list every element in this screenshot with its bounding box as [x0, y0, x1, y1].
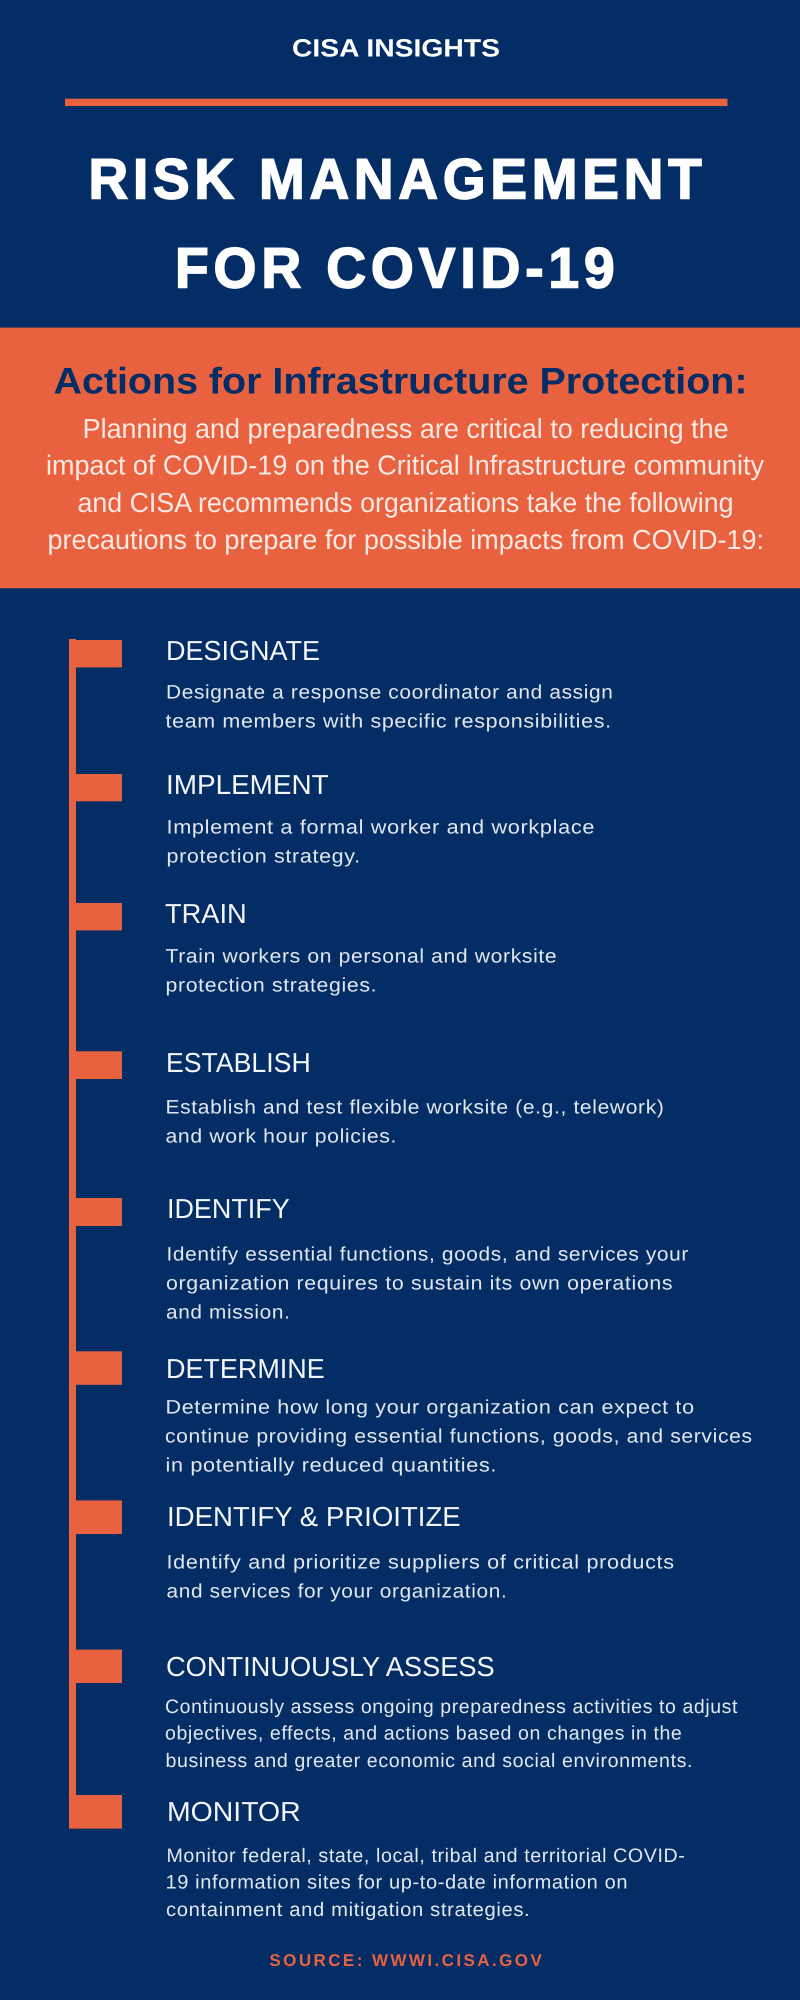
- step: monitor: 19 information sites for up-to-date information on: [166, 1872, 628, 1894]
- header: eyebrow, rule and title: [65, 35, 728, 300]
- step: identify and prioritize: and services for your organization.: [167, 1581, 507, 1603]
- panel: actions for infrastructure protection: [0, 328, 800, 588]
- step: train: TRAIN: [165, 898, 247, 929]
- panel intro text: [46, 413, 764, 555]
- step: continuously assess: Continuously assess ongoing preparedness activities to adjust: [165, 1696, 738, 1718]
- step: implement: IMPLEMENT: [166, 769, 329, 800]
- step: identify: IDENTIFY: [167, 1193, 290, 1224]
- step: establish: Establish and test flexible worksite (e.g., telework): [166, 1096, 665, 1118]
- step: determine: in potentially reduced quantities.: [166, 1454, 497, 1476]
- step: identify: [166, 1193, 689, 1324]
- panel intro text: and CISA recommends organizations take the following: [78, 487, 734, 518]
- timeline spine with markers: [69, 639, 122, 1829]
- step: continuously assess: business and greater economic and social environments.: [166, 1750, 693, 1772]
- step: implement: Implement a formal worker and workplace: [167, 816, 595, 838]
- step: designate: team members with specific responsibilities.: [166, 711, 612, 733]
- step: identify and prioritize: [166, 1501, 675, 1603]
- step: continuously assess: objectives, effects, and actions based on changes in the: [165, 1723, 682, 1745]
- step: identify: organization requires to sustain its own operations: [166, 1273, 673, 1295]
- step: determine: DETERMINE: [166, 1353, 325, 1384]
- step: designate: DESIGNATE: [166, 635, 320, 666]
- step: monitor: [166, 1796, 685, 1921]
- panel intro text: impact of COVID-19 on the Critical Infrastructure community: [46, 450, 764, 481]
- eyebrow: CISA Insights: CISA INSIGHTS: [292, 35, 500, 63]
- step: monitor: Monitor federal, state, local, tribal and territorial COVID-: [167, 1845, 685, 1867]
- step: identify and prioritize: Identify and prioritize suppliers of critical products: [167, 1552, 675, 1574]
- step: establish: and work hour policies.: [166, 1125, 397, 1147]
- panel intro text: Planning and preparedness are critical to reducing the: [83, 413, 729, 444]
- title: FOR COVID-19: [175, 236, 620, 300]
- step: continuously assess: CONTINUOUSLY ASSESS: [166, 1651, 495, 1682]
- step: train: protection strategies.: [166, 974, 377, 996]
- step: determine: Determine how long your organization can expect to: [166, 1396, 695, 1418]
- step: continuously assess: [165, 1651, 738, 1772]
- step: implement: protection strategy.: [167, 845, 361, 867]
- step: determine: continue providing essential functions, goods, and services: [165, 1425, 753, 1447]
- step: establish: ESTABLISH: [166, 1047, 311, 1078]
- panel intro text: precautions to prepare for possible impacts from COVID-19:: [48, 524, 764, 555]
- step: monitor: MONITOR: [167, 1796, 301, 1827]
- step: identify: and mission.: [166, 1302, 290, 1324]
- source footer: SOURCE: WWWI.CISA.GOV: [269, 1951, 542, 1970]
- header rule: [65, 99, 728, 106]
- step: identify and prioritize: IDENTIFY & PRIOITIZE: [167, 1501, 461, 1532]
- title: [88, 148, 706, 300]
- step: implement: [166, 769, 595, 867]
- step: monitor: containment and mitigation strategies.: [166, 1899, 530, 1921]
- step: train: [165, 898, 557, 996]
- panel heading: Actions for Infrastructure Protection:: [54, 360, 748, 401]
- step: designate: [166, 635, 614, 733]
- step: determine: [165, 1353, 753, 1476]
- step: identify: Identify essential functions, goods, and services your: [167, 1244, 689, 1266]
- step: designate: Designate a response coordinator and assign: [166, 682, 614, 704]
- step: establish: [166, 1047, 664, 1147]
- step: train: Train workers on personal and worksite: [166, 945, 557, 967]
- title: RISK MANAGEMENT: [88, 148, 706, 212]
